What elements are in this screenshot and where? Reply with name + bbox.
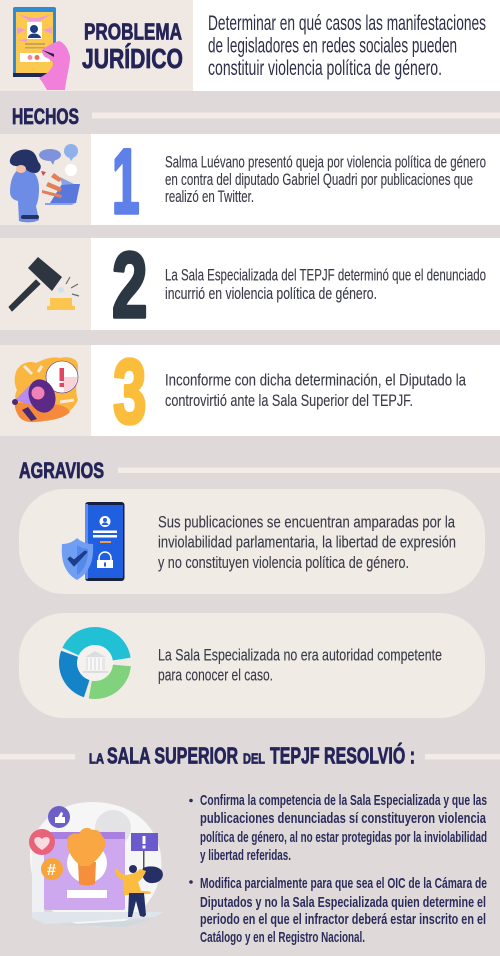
icon: megaphone <box>12 357 78 422</box>
panel: hecho 3 <box>0 341 500 443</box>
icon: woman harassed online <box>10 144 80 222</box>
heading: problema jurídico <box>82 18 183 74</box>
heading: hechos <box>12 104 500 129</box>
bullet: confirma <box>189 792 487 864</box>
bullet: confirma: y libertad referidas. <box>200 847 291 864</box>
icon: gavel <box>9 257 79 311</box>
text: hecho 1 <box>165 154 486 206</box>
icon: protest illustration <box>29 802 163 927</box>
heading: la sala superior del tepjf resolvió: SALA SUPERIOR <box>107 742 238 768</box>
text: hecho 2 <box>165 266 486 303</box>
number: 3: 3 <box>113 341 146 443</box>
bullet: modifica: Catálogo y en el Registro Nacional. <box>200 929 365 946</box>
bullet: modifica <box>189 875 487 946</box>
panel: hecho 1 <box>0 131 500 233</box>
text: agravio 1: y no constituyen violencia política de género. <box>158 554 409 572</box>
heading: la sala superior del tepjf resolvió: TEPJF RESOLVIÓ : <box>270 742 415 768</box>
text: agravio 2 <box>158 646 442 684</box>
text: problema description <box>208 12 486 80</box>
icon: tablet held by hand <box>13 7 70 90</box>
heading: agravios <box>19 458 500 483</box>
heading: agravios: AGRAVIOS <box>19 458 104 483</box>
panel: agravio 1 <box>19 489 485 594</box>
heading: hechos: HECHOS <box>12 104 79 129</box>
text: agravio 2: para conocer el caso. <box>158 666 273 684</box>
panel: hecho 2 <box>0 233 500 337</box>
panel: problema jurídico <box>0 0 500 91</box>
number: 2: 2 <box>112 233 148 337</box>
text: hecho 3: controvirtió ante la Sala Superior del TEPJF. <box>165 392 413 410</box>
icon: protest illustration: # <box>47 862 56 879</box>
heading: problema jurídico: JURÍDICO <box>82 43 183 74</box>
number: 1: 1 <box>112 131 140 233</box>
heading: problema jurídico: PROBLEMA <box>84 18 182 44</box>
heading: la sala superior del tepjf resolvió: DEL <box>243 750 265 768</box>
text: hecho 1: realizó en Twitter. <box>165 188 254 206</box>
text: resolución <box>189 792 487 946</box>
panel: agravio 2 <box>19 613 485 718</box>
text: hecho 3 <box>165 372 467 410</box>
text: hecho 2: incurrió en violencia política de género. <box>165 285 377 303</box>
icon: cycle with building <box>68 636 122 690</box>
text: agravio 1 <box>158 514 456 572</box>
icon: phone and shield <box>62 502 124 581</box>
heading: la sala superior del tepjf resolvió: LA <box>89 750 104 768</box>
heading: la sala superior del tepjf resolvió <box>0 742 500 768</box>
